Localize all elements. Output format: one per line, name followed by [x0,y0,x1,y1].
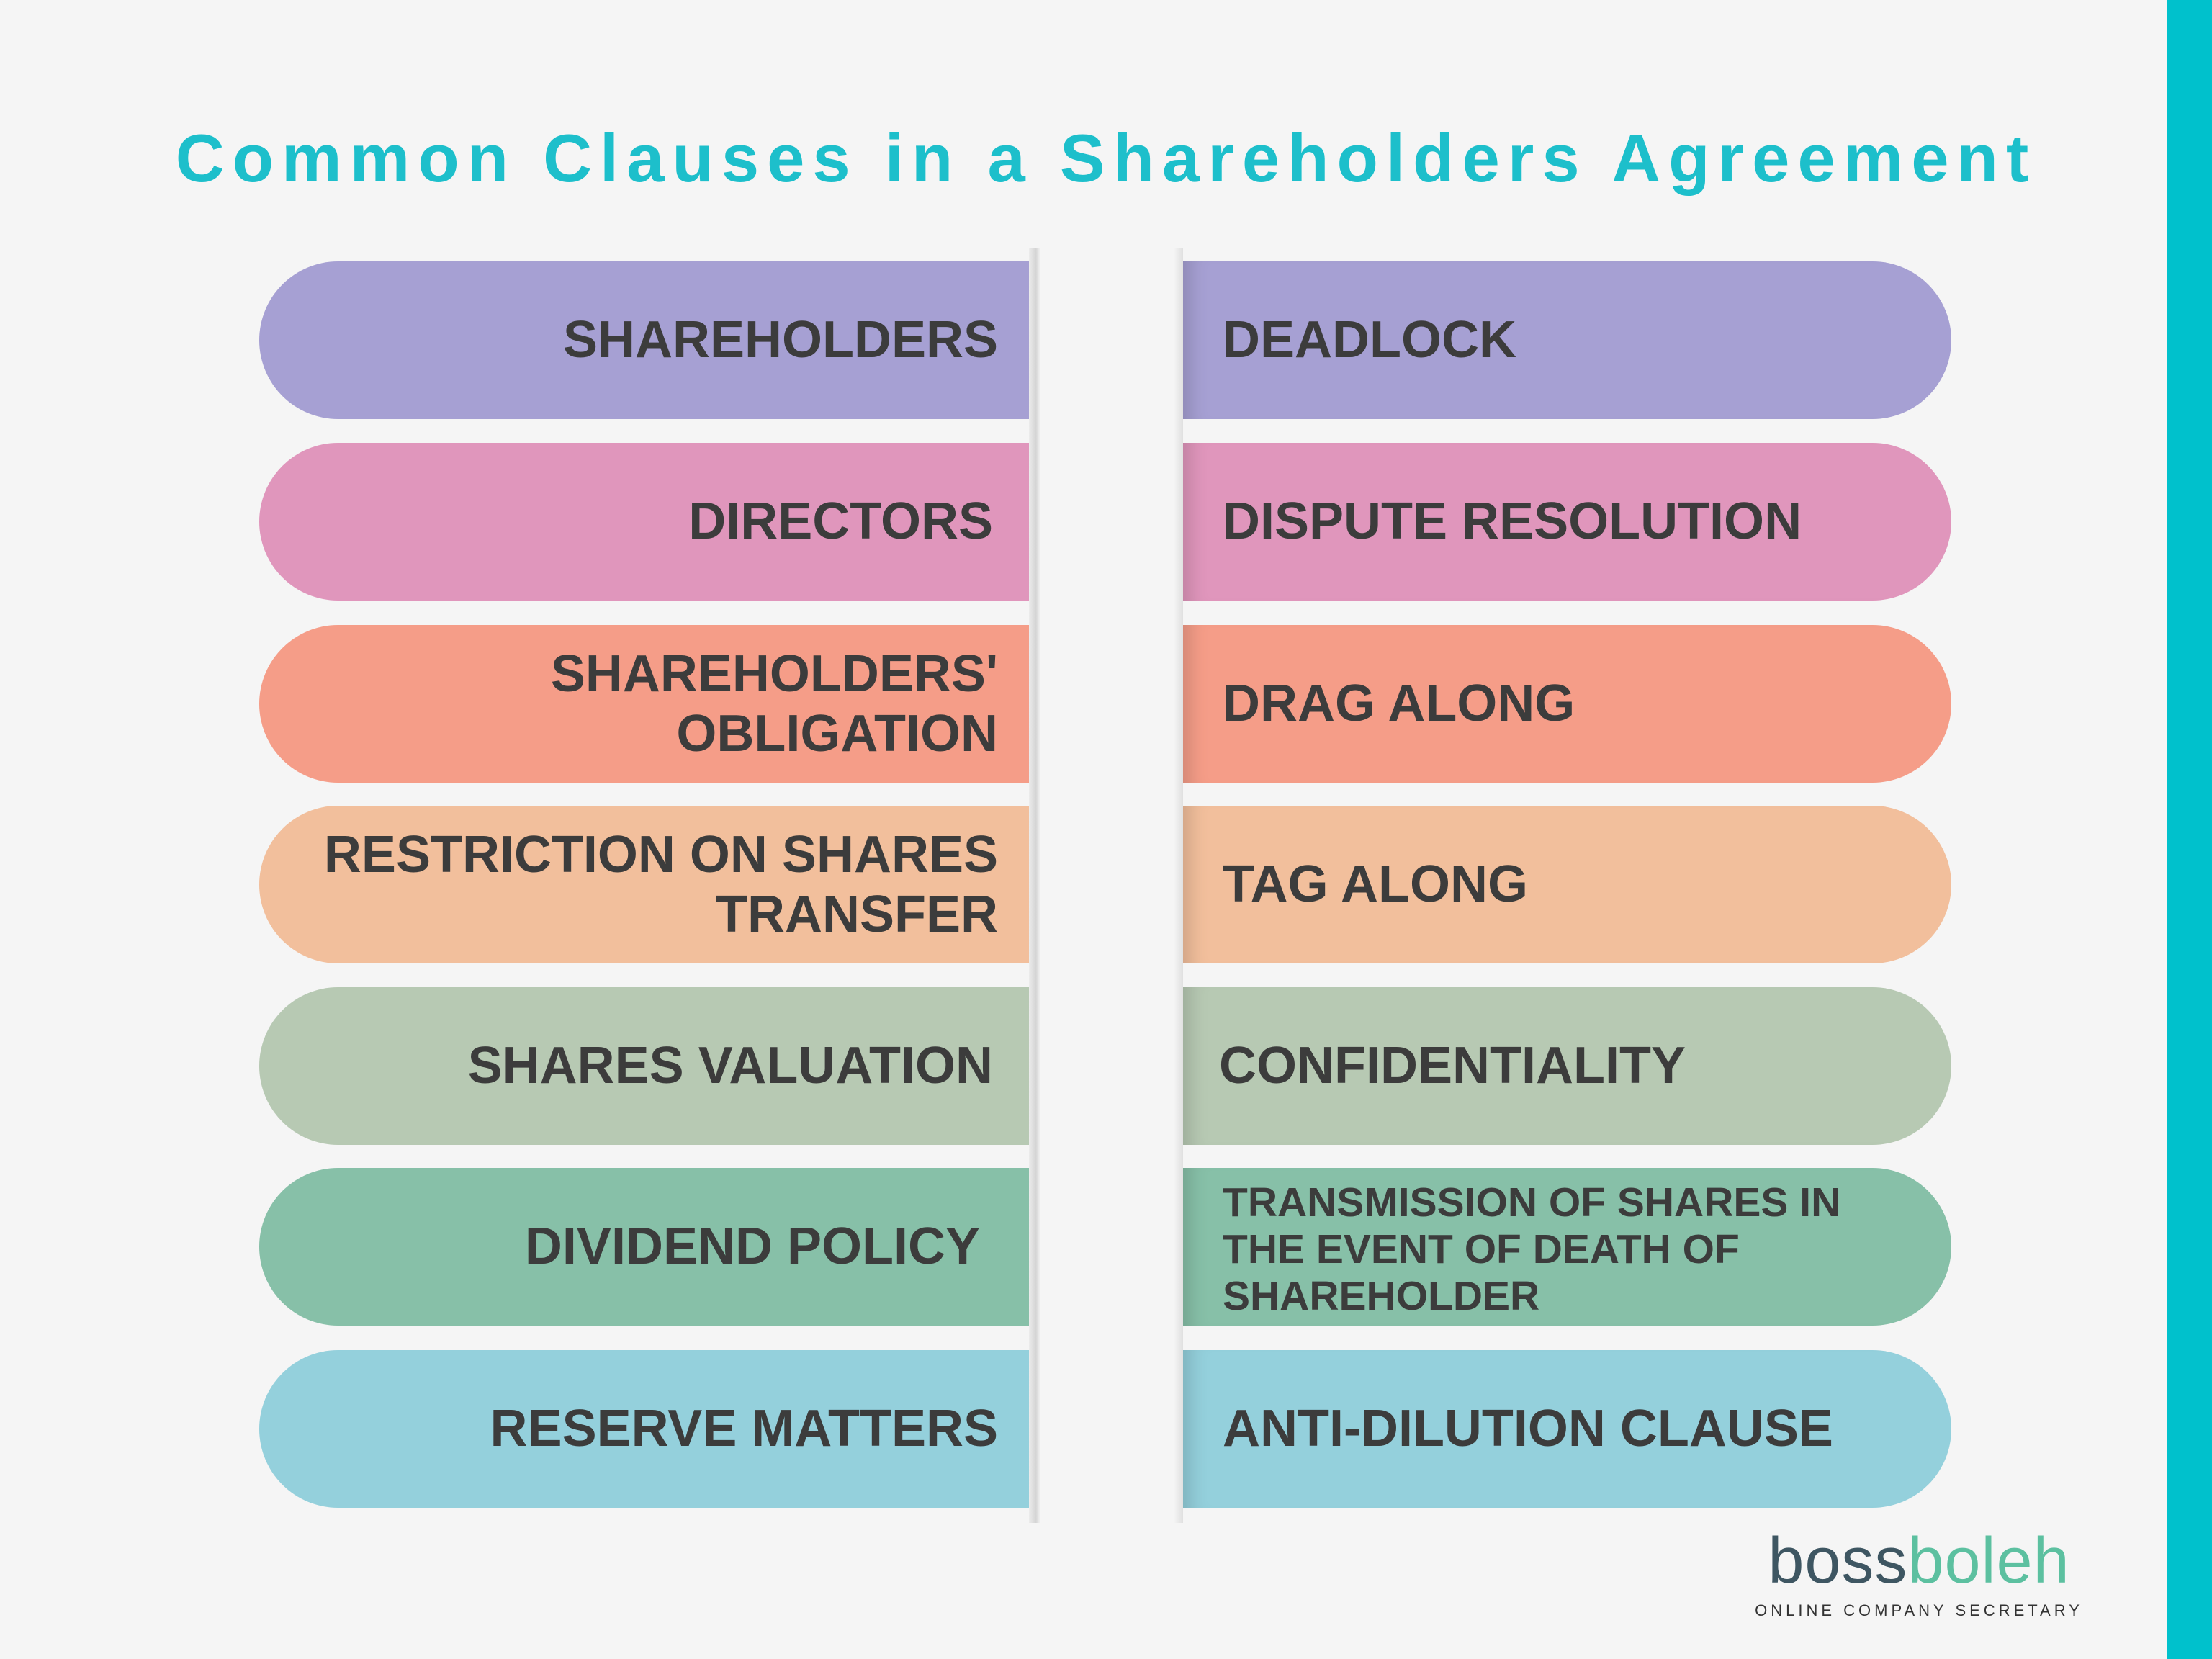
accent bar [2167,0,2212,1659]
pill: drag along: DRAG ALONG [1223,675,1575,732]
divider shadow left [1029,248,1040,1523]
pill: restriction on shares transfer: TRANSFER [716,886,998,943]
left column [259,261,1029,1508]
right column [1183,261,1951,1508]
pill: dividend policy: DIVIDEND POLICY [525,1218,980,1275]
logo [1755,1525,2083,1619]
pill: deadlock: DEADLOCK [1223,311,1516,369]
title: Common Clauses in a Shareholders Agreement [176,120,2036,196]
pill: transmission of shares [1183,1168,1951,1326]
pill: restriction on shares transfer [259,806,1029,963]
pill: transmission of shares: TRANSMISSION OF SHARES IN [1223,1179,1840,1226]
pill: directors [259,443,1029,601]
pill: transmission of shares: SHAREHOLDER [1223,1273,1539,1319]
pill: restriction on shares transfer: RESTRICTION ON SHARES [324,826,998,884]
pill: drag along [1183,625,1951,783]
pill: anti-dilution clause [1183,1350,1951,1508]
pill: directors: DIRECTORS [688,493,993,550]
pill: shareholders obligation: OBLIGATION [676,704,998,762]
pill: shareholders: SHAREHOLDERS [563,311,998,369]
pill: dividend policy [259,1168,1029,1326]
pill: shareholders obligation: SHAREHOLDERS' [551,645,998,703]
pill: anti-dilution clause: ANTI-DILUTION CLAUSE [1223,1400,1833,1457]
pill: reserve matters [259,1350,1029,1508]
pill: shareholders [259,261,1029,419]
pill: shareholders obligation [259,625,1029,783]
pill: dispute resolution: DISPUTE RESOLUTION [1223,493,1802,550]
logo tagline: ONLINE COMPANY SECRETARY [1755,1601,2083,1619]
divider shadow right [1174,248,1183,1523]
pill: confidentiality: CONFIDENTIALITY [1219,1037,1686,1094]
pill: transmission of shares: THE EVENT OF DEATH OF [1223,1226,1740,1272]
pill: tag along [1183,806,1951,963]
pill: confidentiality [1183,987,1951,1145]
pill: reserve matters: RESERVE MATTERS [490,1400,998,1457]
pill: dispute resolution [1183,443,1951,601]
pill: shares valuation [259,987,1029,1145]
pill: deadlock [1183,261,1951,419]
pill: tag along: TAG ALONG [1223,855,1528,913]
pill: shares valuation: SHARES VALUATION [468,1037,993,1094]
logo wordmark: bossboleh [1768,1525,2070,1597]
